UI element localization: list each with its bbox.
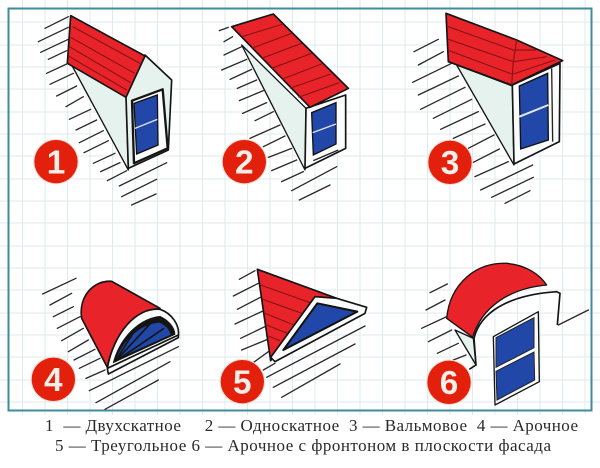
roof 3: [446, 13, 563, 85]
badge 6: [426, 360, 472, 405]
badge 5: [220, 359, 265, 404]
badge 6: 6: [440, 365, 458, 402]
shingles 2: [242, 24, 339, 97]
side wall 1: [72, 65, 128, 170]
badge 5: 5: [233, 364, 252, 401]
arched window 4: [107, 309, 179, 368]
dormer 4: arched: [31, 278, 179, 409]
arched roof 4: [81, 281, 160, 367]
badge 4: 4: [44, 362, 63, 399]
dormer 1: gable: [33, 16, 172, 205]
window 3: [519, 68, 553, 149]
badge 3: [427, 140, 473, 185]
roof slope lines 6: [422, 284, 588, 360]
roof slope lines 5: [233, 271, 365, 397]
caption line 1: 1 — Двухскатное 2 — Односкатное 3 — Вальмовое 4 — Арочное: [45, 416, 578, 435]
window 2: [312, 103, 338, 161]
badge 3: 3: [441, 145, 459, 182]
badge 1: 1: [47, 144, 65, 181]
roof slope lines 3: [413, 39, 533, 203]
badge 2: 2: [235, 144, 254, 181]
roof slope lines 1: [38, 17, 167, 205]
triangular roof 5: [257, 269, 337, 361]
roof 1: [67, 16, 145, 97]
sill 4: [107, 335, 178, 374]
side wall 3: [457, 65, 514, 165]
front gable 1: [126, 55, 172, 168]
roof slope lines 2: [219, 27, 337, 200]
badge 1: [33, 139, 79, 184]
shingles 1: [68, 27, 140, 90]
dormer 5: triangular: [220, 269, 367, 404]
front wall 2: [305, 95, 346, 168]
roof slope lines 4: [43, 278, 178, 409]
roof 2: [232, 14, 348, 107]
front wall 3: [512, 63, 560, 164]
dormer 2: shed: [219, 14, 348, 200]
side wall 2: [242, 45, 306, 170]
shingles 3: [448, 27, 555, 85]
shingles 5: [261, 285, 310, 341]
window 6: [493, 312, 539, 405]
dormer 3: hip: [413, 13, 563, 203]
dormer 6: arched with gable on facade: [422, 263, 588, 405]
badge 2: [222, 139, 267, 184]
facade outline 6: [469, 292, 560, 369]
caption line 2: 5 — Треугольное 6 — Арочное с фронтоном в плоскости фасада: [55, 436, 551, 455]
side wall 6: [455, 330, 476, 365]
badge 4: [31, 357, 76, 402]
window 1: [132, 89, 168, 163]
arched roof 6: [447, 263, 547, 337]
triangular window 5: [271, 297, 367, 362]
